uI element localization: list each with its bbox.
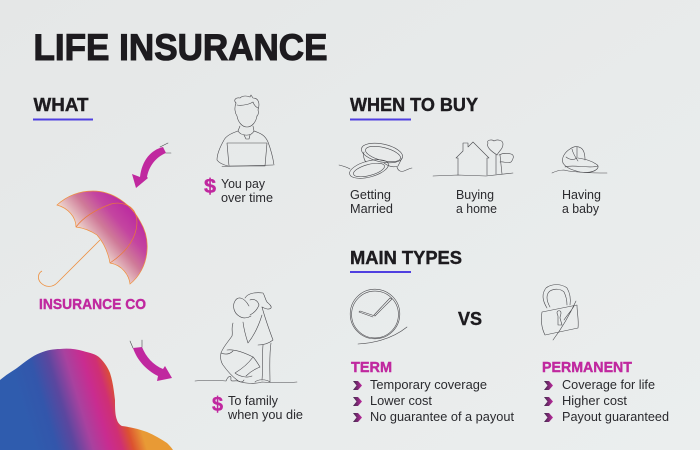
you pay caption [204, 176, 273, 205]
to family caption: $ [212, 394, 223, 416]
insurance co label: INSURANCE CO [39, 296, 146, 313]
chevron [353, 397, 362, 406]
icon: umbrella [38, 191, 147, 286]
permanent list: Higher cost [562, 393, 627, 408]
title: LIFE INSURANCE [34, 27, 328, 68]
chevron [353, 381, 362, 390]
permanent list [542, 359, 669, 424]
icon: person with laptop [217, 95, 274, 166]
chevron [544, 397, 553, 406]
heading: main types: MAIN TYPES [350, 248, 462, 268]
you pay caption: over time [221, 190, 273, 205]
term list: No guarantee of a payout [370, 409, 514, 424]
having a baby caption [562, 187, 601, 216]
buying a home caption: Buying [456, 187, 494, 202]
getting married caption [350, 187, 393, 216]
heading: what: WHAT [34, 95, 88, 115]
icon: padlock [541, 285, 578, 340]
buying a home caption: a home [456, 201, 497, 216]
icon: parent and child embracing [195, 293, 297, 383]
getting married caption: Getting [350, 187, 391, 202]
arrow: to family [130, 340, 172, 381]
heading: what [33, 95, 93, 120]
arrow: to insurance company [132, 143, 171, 188]
having a baby caption: Having [562, 187, 601, 202]
chevron [544, 413, 553, 422]
permanent list: PERMANENT [542, 359, 632, 376]
getting married caption: Married [350, 201, 393, 216]
icon: clock [350, 289, 407, 344]
vs label: VS [458, 309, 482, 329]
term list: Temporary coverage [370, 377, 487, 392]
buying a home caption [456, 187, 497, 216]
term list [351, 359, 514, 424]
permanent list: Payout guaranteed [562, 409, 669, 424]
term list: Lower cost [370, 393, 432, 408]
permanent list: Coverage for life [562, 377, 655, 392]
chevron [353, 413, 362, 422]
term list: TERM [351, 359, 392, 376]
you pay caption: $ [204, 176, 216, 198]
to family caption: when you die [227, 407, 303, 422]
to family caption [212, 393, 303, 422]
heading: when to buy: WHEN TO BUY [350, 95, 478, 115]
icon: baby bassinet [552, 147, 607, 173]
icon: wedding rings [339, 140, 412, 182]
having a baby caption: a baby [562, 201, 599, 216]
to family caption: To family [228, 393, 278, 408]
decorative gradient blob [0, 349, 173, 450]
chevron [544, 381, 553, 390]
icon: house and tree [433, 140, 513, 176]
you pay caption: You pay [221, 176, 265, 191]
